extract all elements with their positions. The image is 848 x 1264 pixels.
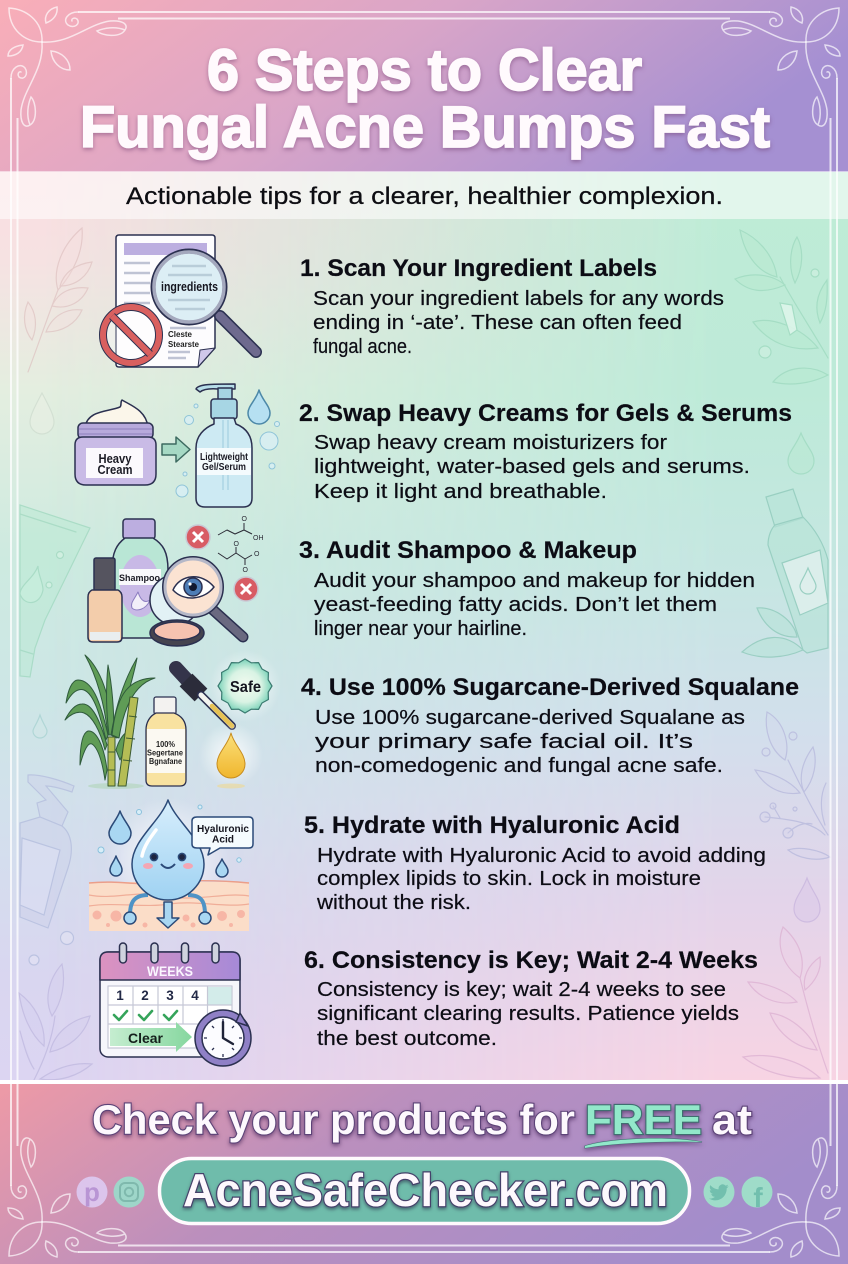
icon: ingredient label with magnifier and prohibited sign: Stearste: [168, 339, 199, 349]
icon: sugarcane, squalane bottle, dropper, safe badge and oil drop: Safe: [230, 679, 261, 696]
step 3 text: Audit your shampoo and makeup for hidden: [314, 569, 755, 592]
step 2 text: 2. Swap Heavy Creams for Gels & Serums: [299, 400, 792, 427]
icon: heavy cream jar to gel serum pump bottle: Lightweight: [200, 452, 249, 463]
icon: weeks calendar with clear arrow and clock: 1: [116, 988, 124, 1003]
step 5 text: without the risk.: [316, 891, 471, 914]
icon: weeks calendar with clear arrow and clock: 3: [166, 988, 174, 1003]
step 4 text: Use 100% sugarcane-derived Squalane as: [315, 706, 745, 729]
step 6 text: 6. Consistency is Key; Wait 2-4 Weeks: [304, 947, 758, 974]
icon: heavy cream jar to gel serum pump bottle: Cream: [98, 463, 132, 477]
icon: ingredient label with magnifier and prohibited sign: Cleste: [168, 329, 192, 339]
step 6 text: [304, 947, 758, 1050]
background: header gradient band: [0, 0, 848, 172]
step 5 text: [304, 812, 766, 914]
title: [80, 38, 770, 160]
icon: smiling hyaluronic acid drop on skin layers: [89, 798, 253, 931]
icon: smiling hyaluronic acid drop on skin layers: Hyaluronic: [197, 823, 249, 835]
footer band: [0, 1080, 848, 1264]
footer call to action line: FREE: [585, 1096, 702, 1143]
step 6 text: significant clearing results. Patience yields: [317, 1002, 739, 1025]
step 3 text: [299, 537, 755, 640]
step 2 text: [299, 400, 792, 503]
icon: weeks calendar with clear arrow and clock: [100, 943, 251, 1066]
icon: shampoo, foundation, compact, magnified eye and molecules: OH: [253, 535, 264, 542]
icon: weeks calendar with clear arrow and clock: WEEKS: [147, 964, 193, 979]
icon: shampoo, foundation, compact, magnified eye and molecules: Shampoo: [119, 573, 160, 584]
icon: sugarcane, squalane bottle, dropper, safe badge and oil drop: 100%: [156, 739, 175, 749]
footer call to action line: at: [712, 1096, 752, 1143]
icon: shampoo, foundation, compact, magnified eye and molecules: O: [242, 567, 248, 574]
step 5 text: complex lipids to skin. Lock in moisture: [317, 867, 701, 890]
icon: sugarcane, squalane bottle, dropper, safe badge and oil drop: [65, 650, 281, 789]
step 1 text: fungal acne.: [313, 335, 412, 358]
step 6 text: the best outcome.: [317, 1027, 497, 1050]
icon: weeks calendar with clear arrow and clock: 4: [191, 988, 199, 1003]
step 1 text: 1. Scan Your Ingredient Labels: [300, 255, 657, 282]
step 6 text: Consistency is key; wait 2-4 weeks to see: [317, 978, 726, 1001]
title: 6 Steps to Clear: [207, 38, 642, 103]
icon: shampoo, foundation, compact, magnified eye and molecules: O: [234, 541, 240, 548]
icon: heavy cream jar to gel serum pump bottle: Heavy: [98, 452, 132, 466]
icon: heavy cream jar to gel serum pump bottle: Gel/Serum: [202, 462, 246, 473]
step 4 text: 4. Use 100% Sugarcane-Derived Squalane: [301, 674, 799, 701]
step 5 text: 5. Hydrate with Hyaluronic Acid: [304, 812, 680, 839]
website button: AcneSafeChecker.com: [183, 1164, 668, 1216]
icon: ingredient label with magnifier and prohibited sign: ingredients: [161, 280, 218, 294]
footer call to action line: Check your products for: [92, 1096, 575, 1143]
icon: shampoo, foundation, compact, magnified eye and molecules: [88, 516, 264, 646]
icon: weeks calendar with clear arrow and clock: Clear: [128, 1030, 164, 1046]
step 2 text: Swap heavy cream moisturizers for: [314, 431, 667, 454]
icon: shampoo, foundation, compact, magnified eye and molecules: O: [242, 516, 248, 523]
footer call to action line: [92, 1096, 752, 1148]
step 4 text: [301, 674, 799, 777]
background botanical decorations: [19, 228, 830, 1080]
step 1 text: ending in ‘-ate’. These can often feed: [313, 311, 682, 334]
icon: facebook: f: [753, 1182, 763, 1213]
icon: weeks calendar with clear arrow and clock: 2: [141, 988, 149, 1003]
icon: ingredient label with magnifier and prohibited sign: [103, 235, 256, 367]
icon: pinterest: [76, 1176, 108, 1208]
subtitle band: Actionable tips for a clearer, healthier complexion.: [126, 183, 723, 210]
step 1 text: [300, 255, 724, 358]
icon: sugarcane, squalane bottle, dropper, safe badge and oil drop: Bgnafane: [149, 756, 182, 766]
icon: sugarcane, squalane bottle, dropper, safe badge and oil drop: Segertane: [147, 748, 183, 758]
step 2 text: lightweight, water-based gels and serums.: [314, 455, 750, 478]
icon: twitter: [704, 1176, 734, 1208]
title: Fungal Acne Bumps Fast: [80, 95, 770, 160]
icon: shampoo, foundation, compact, magnified eye and molecules: O: [254, 551, 260, 558]
icon: heavy cream jar to gel serum pump bottle: [75, 384, 280, 507]
step 3 text: yeast-feeding fatty acids. Don’t let them: [314, 593, 717, 616]
icon: instagram: [114, 1176, 144, 1208]
step 3 text: linger near your hairline.: [314, 617, 527, 640]
step 4 text: your primary safe facial oil. It’s: [315, 730, 693, 753]
step 2 text: Keep it light and breathable.: [314, 480, 607, 503]
step 5 text: Hydrate with Hyaluronic Acid to avoid adding: [317, 844, 766, 867]
icon: pinterest: p: [84, 1177, 100, 1207]
subtitle band: [0, 171, 848, 219]
step 1 text: Scan your ingredient labels for any words: [313, 287, 724, 310]
icon: smiling hyaluronic acid drop on skin layers: Acid: [212, 834, 234, 846]
icon: facebook: [742, 1176, 772, 1213]
step 4 text: non-comedogenic and fungal acne safe.: [315, 754, 723, 777]
step 3 text: 3. Audit Shampoo & Makeup: [299, 537, 637, 564]
